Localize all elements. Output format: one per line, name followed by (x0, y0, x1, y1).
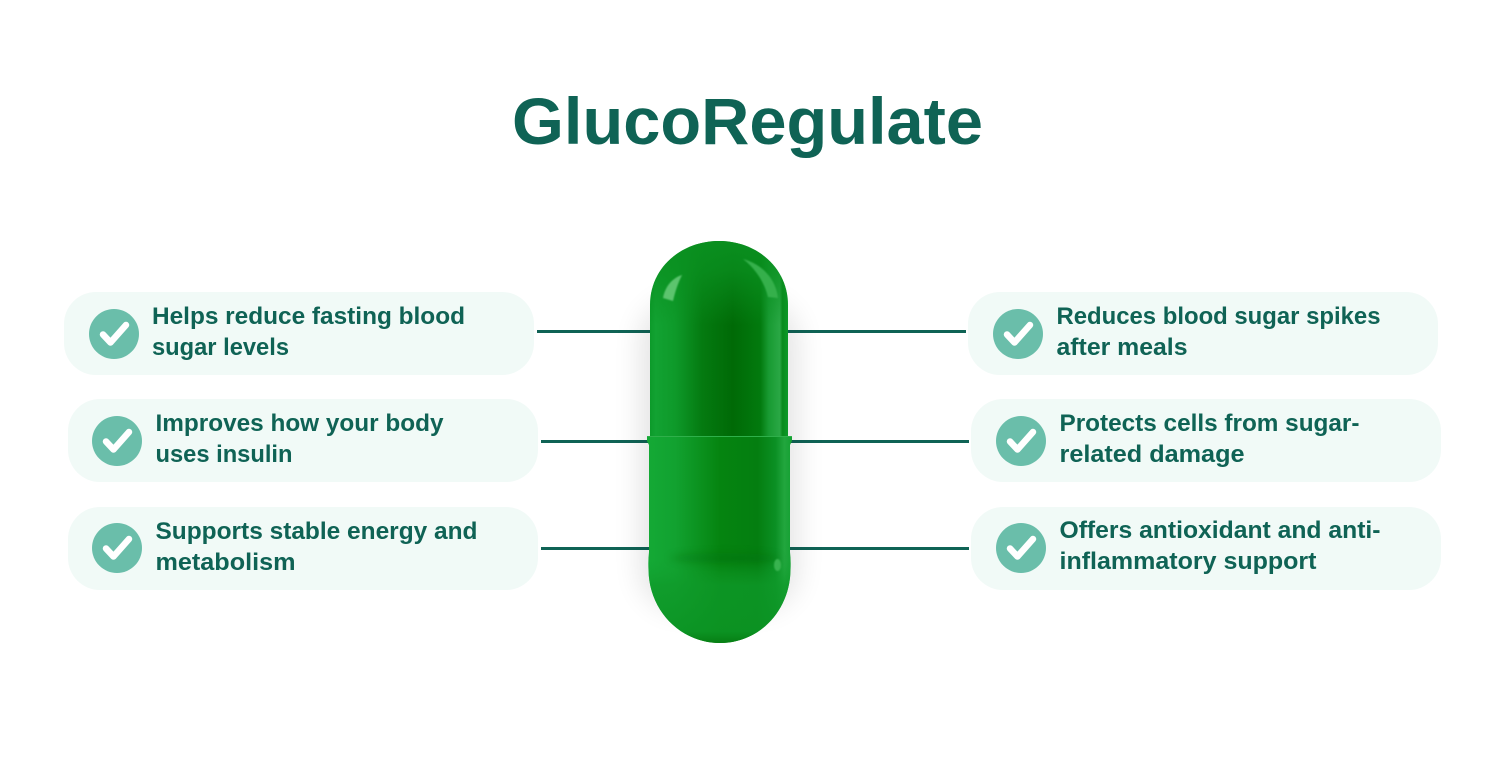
text: uses insulin (156, 441, 292, 468)
icon: check (92, 523, 142, 573)
text: inflammatory support (1060, 548, 1316, 575)
icon: check (993, 309, 1043, 359)
icon: check (92, 416, 142, 466)
benefit: cells (971, 399, 1441, 482)
connector lines (537, 330, 969, 550)
text: Protects cells from sugar- (1060, 410, 1360, 437)
text: Offers antioxidant and anti- (1060, 517, 1380, 544)
benefit: energy (68, 507, 538, 590)
text: related damage (1060, 441, 1244, 468)
text: metabolism (156, 549, 296, 576)
text (156, 410, 444, 468)
text (152, 303, 465, 361)
text (156, 518, 478, 576)
text (1060, 410, 1360, 468)
text: Helps reduce fasting blood (152, 303, 465, 330)
text: Supports stable energy and (156, 518, 478, 545)
benefit: spikes (968, 292, 1438, 375)
text: after meals (1056, 334, 1188, 361)
text: Improves how your body (156, 410, 444, 437)
capsule shadow (640, 300, 798, 610)
capsule upper shell (650, 241, 788, 440)
text: sugar levels (152, 334, 289, 361)
text: Reduces blood sugar spikes (1056, 303, 1380, 330)
capsule (640, 241, 798, 646)
benefit: antioxidant (971, 507, 1441, 590)
text (1056, 303, 1380, 361)
benefit: fasting blood sugar (64, 292, 534, 375)
title: GlucoRegulate (512, 84, 983, 158)
icon: check (996, 523, 1046, 573)
icon: check (996, 416, 1046, 466)
text (1060, 517, 1380, 575)
capsule lower shell (645, 434, 795, 646)
icon: check (89, 309, 139, 359)
benefit: insulin (68, 399, 538, 482)
